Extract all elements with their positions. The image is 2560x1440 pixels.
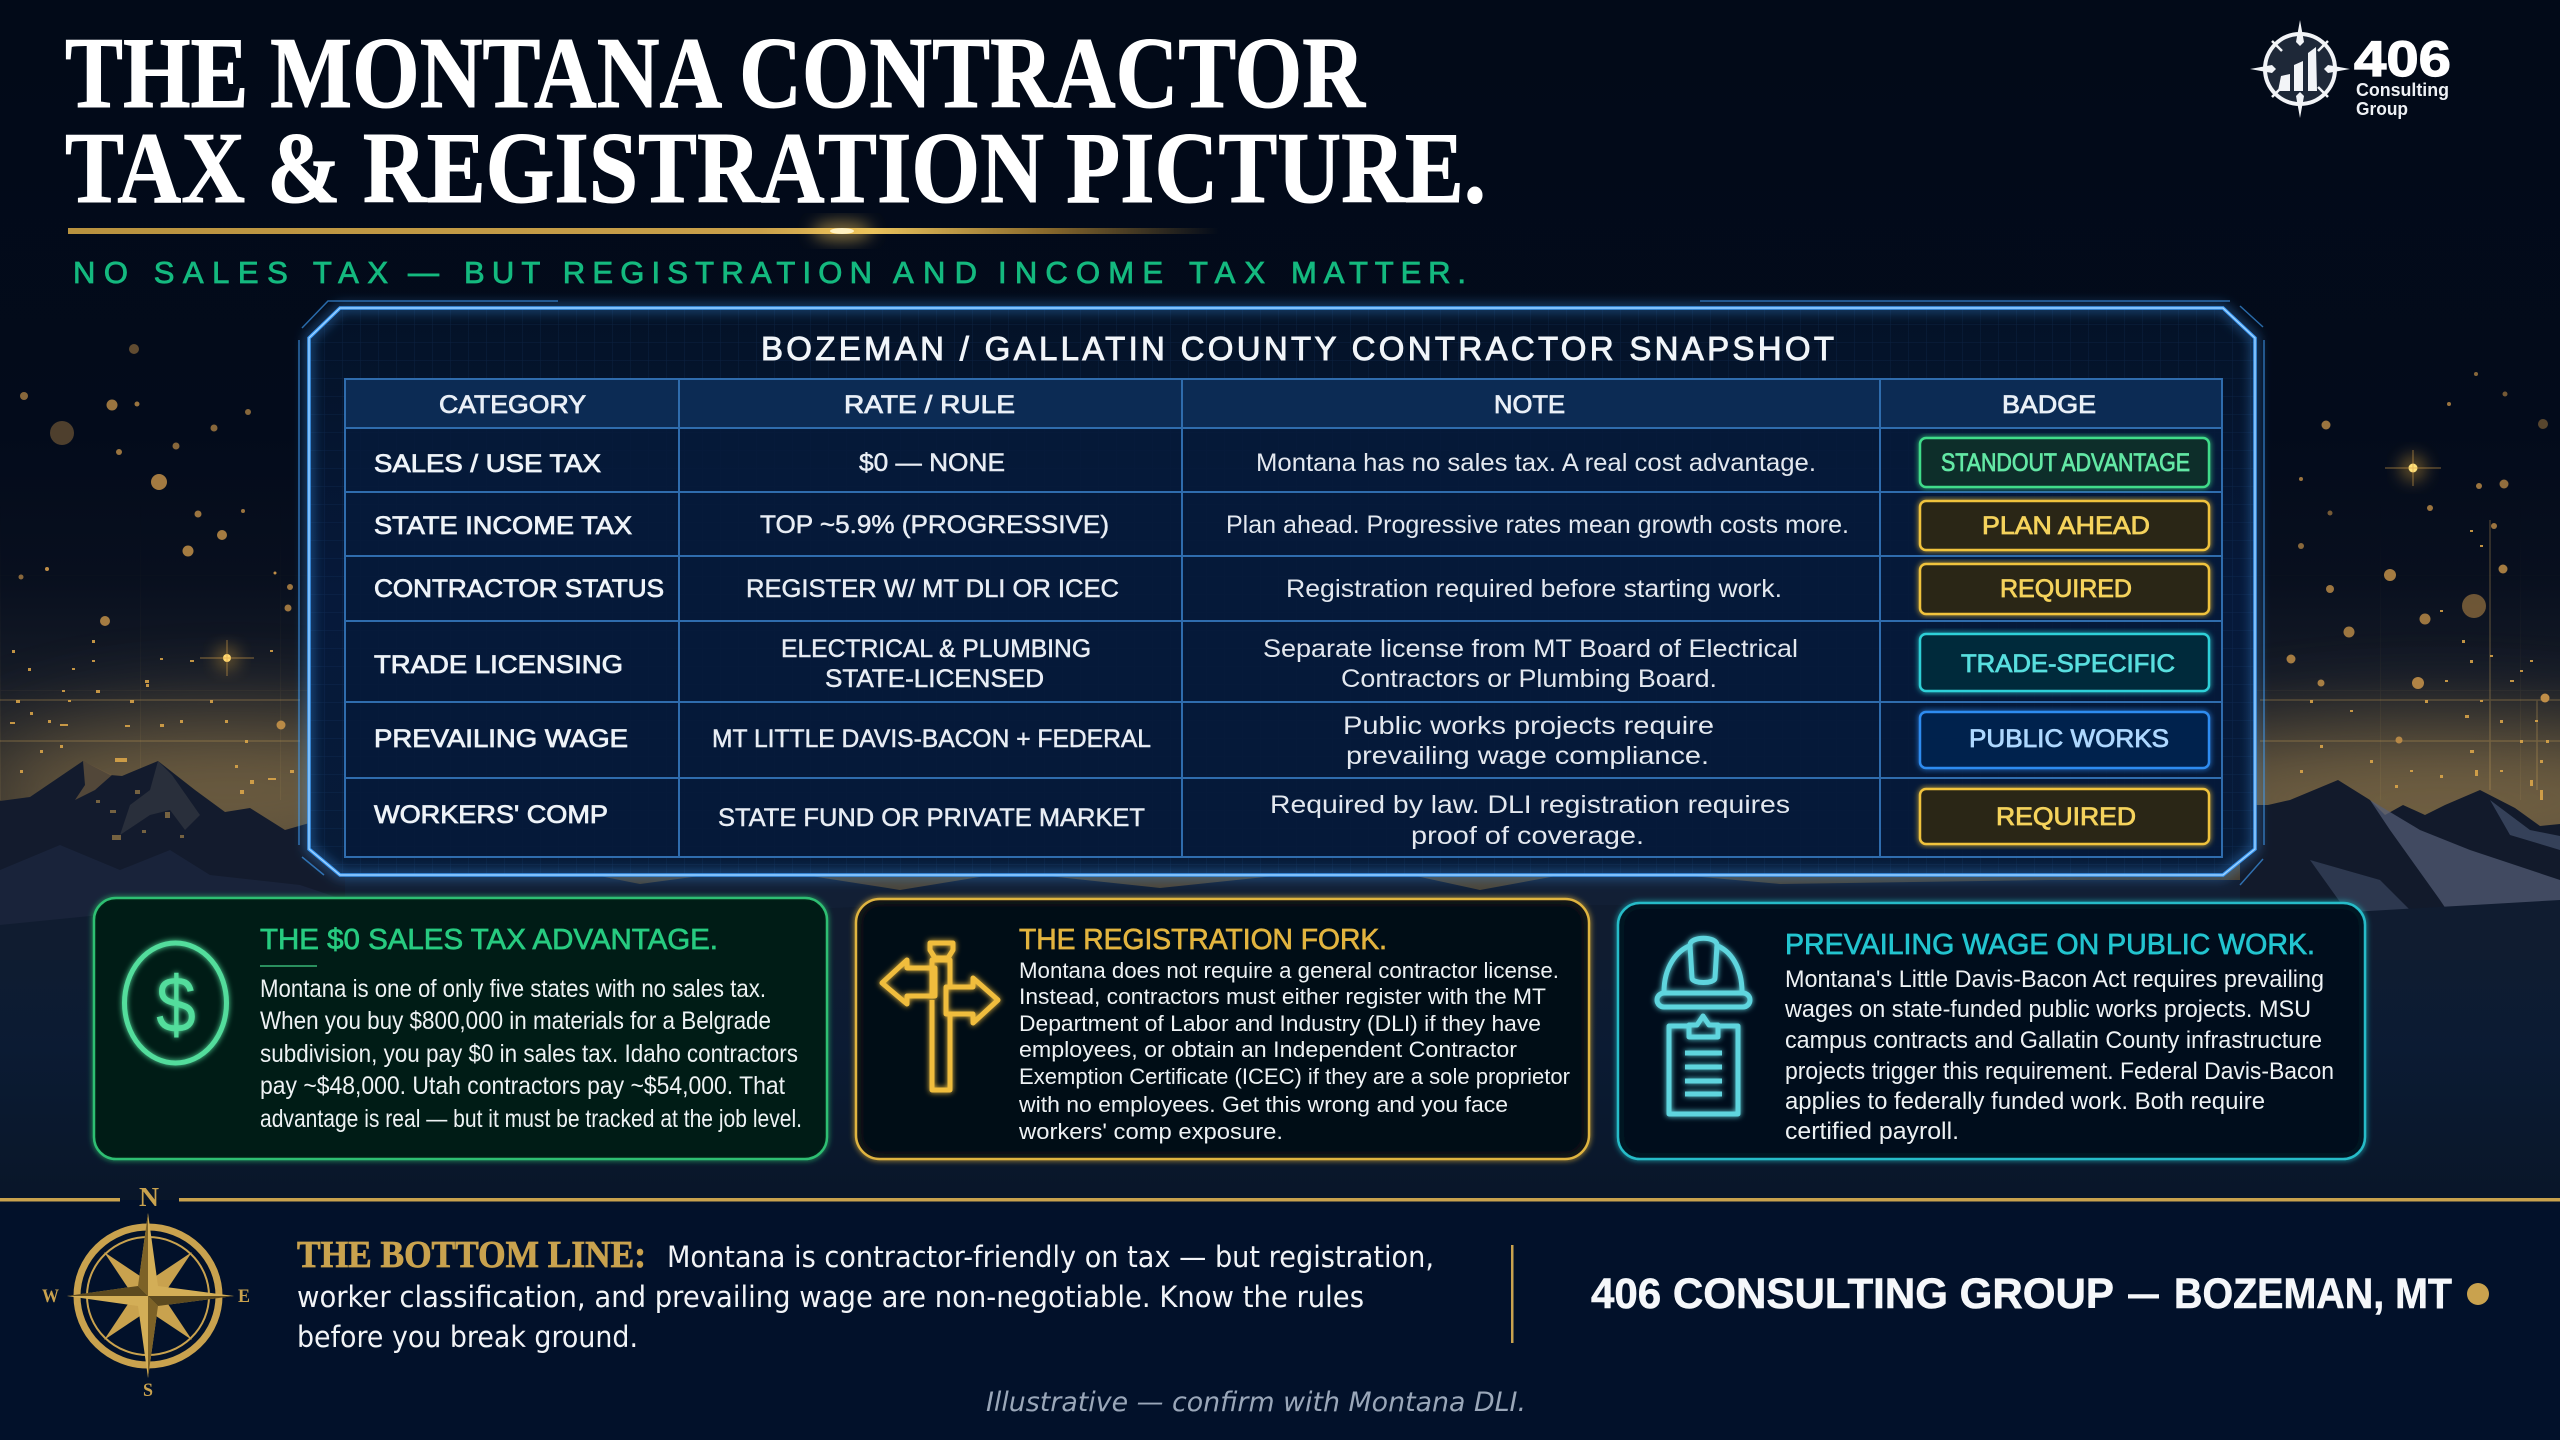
bottom line text: THE BOTTOM LINE: [297,1234,646,1276]
row: sales and use tax: STANDOUT ADVANTAGE [1941,449,2190,477]
card body: Montana's Little Davis-Bacon Act requires prevailing [1785,966,2324,993]
row: trade licensing: Contractors or Plumbing Board. [1341,665,1717,693]
icon: gold compass rose: N [139,1182,160,1212]
card: the registration fork [856,899,1589,1159]
row: workers' comp: STATE FUND OR PRIVATE MARKET [718,804,1145,832]
right mountains [2240,780,2560,960]
icon: gold compass rose: E [238,1286,250,1307]
card body: pay ~$48,000. Utah contractors pay ~$54,000. That [260,1072,785,1100]
logo: 406 Consulting Group: Group [2356,99,2408,119]
row: workers' comp: WORKERS' COMP [374,801,608,829]
row: workers' comp: REQUIRED [1996,803,2136,831]
footer divider [1511,1245,1514,1343]
title: THE MONTANA CONTRACTOR [65,17,1366,130]
row: state income tax: STATE INCOME TAX [374,512,632,540]
card body: subdivision, you pay $0 in sales tax. Idaho contractors [260,1040,798,1068]
subtitle: AND [893,255,977,290]
card body: When you buy $800,000 in materials for a Belgrade [260,1007,771,1035]
bokeh and stars [18,344,2550,744]
bottom line text: worker classification, and prevailing wage are non-negotiable. Know the rules [297,1280,1364,1314]
card body: applies to federally funded work. Both require [1785,1088,2265,1115]
card body: Instead, contractors must either register with the MT [1019,984,1546,1009]
subtitle [73,255,1466,290]
card body: employees, or obtain an Independent Contractor [1019,1037,1517,1062]
table header row [439,391,2096,419]
card: the $0 sales tax advantage [94,898,827,1159]
company sign-off: — [2128,1270,2159,1318]
row: sales and use tax: Montana has no sales tax. A real cost advantage. [1256,449,1816,477]
card body: certified payroll. [1785,1118,1959,1145]
footer band [0,1198,2560,1440]
subtitle: INCOME [998,255,1163,290]
table header row: BADGE [2002,391,2096,419]
row: contractor status: CONTRACTOR STATUS [374,575,664,603]
card: prevailing wage on public work [1618,903,2365,1159]
table header row: CATEGORY [439,391,586,419]
icon: signpost [882,943,998,1090]
company sign-off: BOZEMAN, MT [2174,1270,2452,1318]
bottom line text: Montana is contractor-friendly on tax — but registration, [667,1240,1434,1274]
bottom line text: before you break ground. [297,1320,638,1354]
bottom line text [297,1234,1434,1354]
row: workers' comp: Required by law. DLI registration requires [1270,791,1790,819]
flare star right [2385,450,2441,486]
card body: Montana does not require a general contractor license. [1019,958,1559,983]
logo: 406 Consulting Group [2250,20,2451,119]
title: TAX & REGISTRATION PICTURE. [65,112,1486,225]
row: contractor status: Registration required before starting work. [1286,575,1782,603]
card body: with no employees. Get this wrong and you face [1018,1092,1508,1117]
company sign-off: 406 CONSULTING GROUP [1591,1270,2114,1318]
card body: Department of Labor and Industry (DLI) if they have [1019,1011,1541,1036]
card body [1018,958,1570,1144]
background: night sky and mountains [0,344,2560,1200]
flare star left [200,640,254,676]
table header row: NOTE [1494,391,1565,419]
row: trade licensing: ELECTRICAL & PLUMBING [781,635,1091,663]
subtitle: NO SALES TAX [73,255,388,290]
left mountains [0,761,345,960]
card heading: PREVAILING WAGE ON PUBLIC WORK. [1785,929,2315,961]
mid mountain range [0,860,2560,1000]
panel: contractor snapshot table [299,301,2264,885]
row: prevailing wage: MT LITTLE DAVIS-BACON + FEDERAL [712,725,1151,753]
logo: 406 Consulting Group: 406 [2354,31,2451,87]
row: prevailing wage: PREVAILING WAGE [374,725,628,753]
card body [260,975,802,1133]
row: sales and use tax [374,438,2209,487]
table header row: RATE / RULE [844,391,1015,419]
icon: gold compass rose [42,1182,250,1401]
row: contractor status [374,564,2209,614]
icon: gold compass rose: W [42,1286,59,1307]
card body: campus contracts and Gallatin County infrastructure [1785,1027,2322,1054]
row: sales and use tax: $0 — NONE [859,449,1005,477]
row: state income tax [374,501,2209,550]
card body: Exemption Certificate (ICEC) if they are a sole proprietor [1019,1064,1570,1089]
card body: Montana is one of only five states with no sales tax. [260,975,766,1003]
row: trade licensing [374,634,2209,693]
card body: wages on state-funded public works projects. MSU [1784,996,2311,1023]
gold title rule [68,222,1218,240]
card heading: THE $0 SALES TAX ADVANTAGE. [260,924,718,956]
panel heading: BOZEMAN / GALLATIN COUNTY CONTRACTOR SNAPSHOT [761,330,1834,367]
row: state income tax: PLAN AHEAD [1982,512,2150,540]
row: workers' comp [374,789,2209,850]
icon: hard hat and clipboard [1657,938,1750,1114]
subtitle: — [408,255,439,290]
row: contractor status: REGISTER W/ MT DLI OR ICEC [746,575,1119,603]
disclaimer: Illustrative — confirm with Montana DLI. [986,1387,1526,1418]
icon: dollar coin [124,943,226,1063]
row: trade licensing: Separate license from MT Board of Electrical [1263,635,1798,663]
logo: 406 Consulting Group: Consulting [2356,80,2449,100]
card body: advantage is real — but it must be tracked at the job level. [260,1105,802,1133]
row: prevailing wage [374,712,2209,770]
row: trade licensing: TRADE-SPECIFIC [1961,650,2175,678]
icon: gold compass rose: S [143,1380,153,1401]
card body: projects trigger this requirement. Federal Davis-Bacon [1785,1058,2334,1085]
card heading: THE REGISTRATION FORK. [1019,924,1387,956]
subtitle: BUT REGISTRATION [464,255,872,290]
subtitle: TAX [1189,255,1265,290]
company sign-off [1591,1270,2489,1318]
card body: workers' comp exposure. [1018,1119,1283,1144]
row: state income tax: Plan ahead. Progressive rates mean growth costs more. [1226,511,1849,539]
row: contractor status: REQUIRED [2000,575,2132,603]
row: sales and use tax: SALES / USE TAX [374,450,601,478]
row: trade licensing: STATE-LICENSED [825,665,1044,693]
row: prevailing wage: Public works projects require [1343,712,1714,740]
subtitle: MATTER. [1291,255,1466,290]
row: trade licensing: TRADE LICENSING [374,651,623,679]
row: state income tax: TOP ~5.9% (PROGRESSIVE) [760,511,1109,539]
title [65,17,1486,225]
row: prevailing wage: prevailing wage compliance. [1346,742,1709,770]
card body [1784,966,2334,1145]
table grid [345,379,2222,857]
icon: dollar coin: $ [156,960,196,1049]
row: prevailing wage: PUBLIC WORKS [1969,725,2169,753]
row: workers' comp: proof of coverage. [1411,822,1644,850]
